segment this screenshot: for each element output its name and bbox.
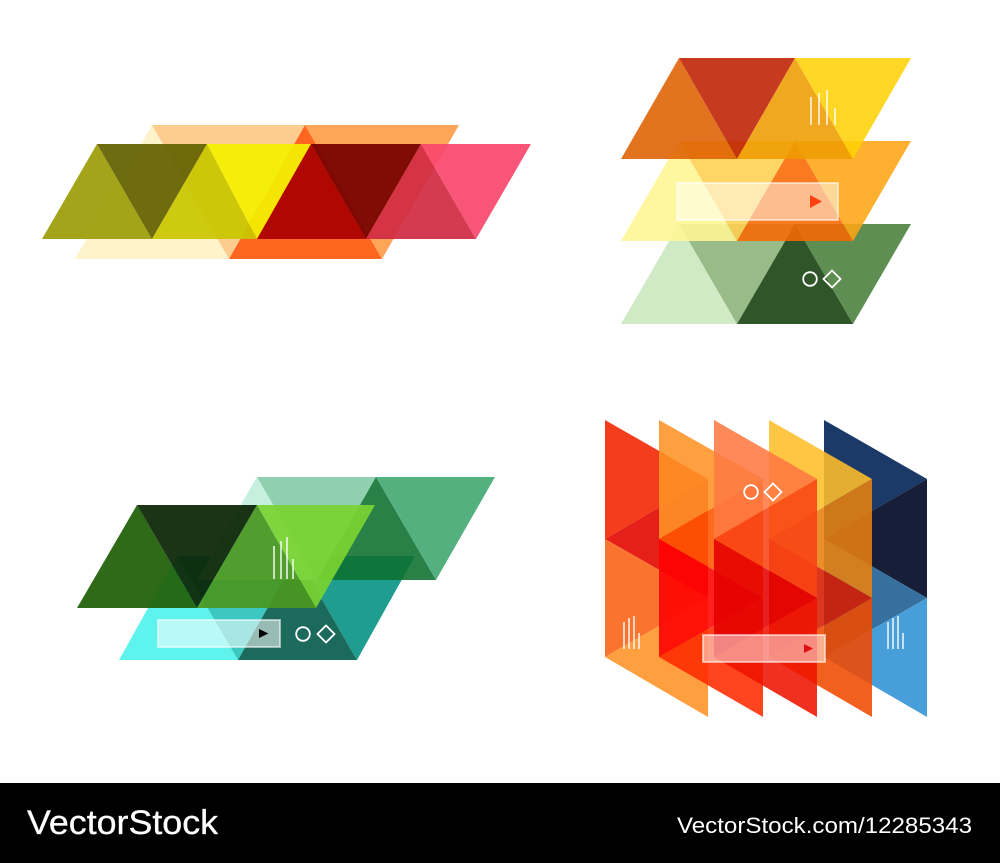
panel: yellow and red triangle banner: [42, 125, 531, 259]
panel: stacked orange, yellow and green banners: [621, 58, 911, 324]
column 5 navy and blue: [824, 420, 927, 717]
yellow and amber strip: [621, 141, 911, 241]
icon: circle and diamond: [744, 484, 782, 500]
button with play arrow: [677, 183, 838, 220]
back orange strip: [75, 125, 459, 259]
footer logo text: VectorStock: [27, 804, 219, 842]
icon: bar lines right: [888, 616, 903, 649]
column 1 red orange: [605, 420, 708, 717]
green strip: [621, 224, 911, 324]
icon: bar lines left: [624, 616, 639, 649]
front olive, yellow, red and pink strip: [42, 144, 531, 239]
column 3 coral and red: [714, 420, 817, 717]
icon: circle and diamond: [803, 270, 840, 288]
orange and gold strip: [621, 58, 911, 159]
dark and lime green strip: [77, 505, 375, 608]
panel: green and teal banners: [77, 477, 495, 660]
icon: bar lines: [811, 90, 835, 125]
mint green strip: [197, 477, 495, 580]
column 4 gold and orange: [769, 420, 872, 717]
footer bar: [0, 783, 1000, 863]
panel: vertical red, orange and blue columns: [605, 420, 927, 717]
footer image id text: VectorStock.com/12285343: [677, 813, 972, 838]
column 2 orange and red: [659, 420, 763, 717]
icon: bar lines: [274, 537, 293, 579]
icon: circle and diamond: [296, 626, 334, 642]
button with play arrow: [703, 635, 825, 662]
teal strip: [119, 556, 415, 660]
button with play arrow: [158, 620, 280, 647]
